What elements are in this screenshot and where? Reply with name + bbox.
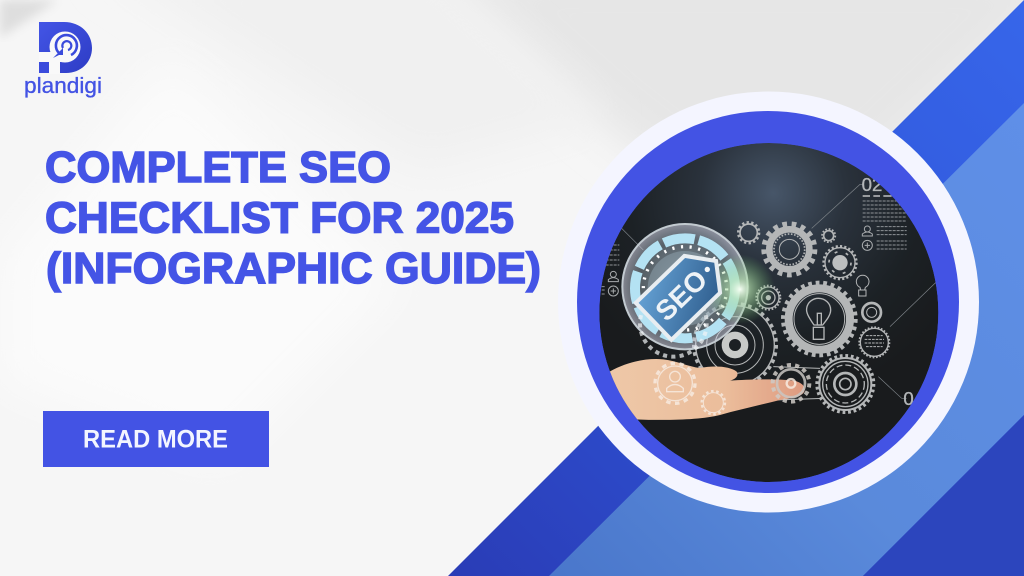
circular photo: hand holding SEO tag and gears: 02: [862, 174, 882, 195]
SEO sphere: [622, 224, 775, 357]
connector lines and data labels: [602, 184, 937, 398]
SEO price tag: [633, 254, 722, 342]
circular frame: [558, 92, 979, 512]
hand: [607, 359, 805, 420]
title: COMPLETE SEO: [45, 143, 391, 192]
gears: [694, 222, 889, 412]
icon: lightbulb: [807, 298, 831, 339]
title: CHECKLIST FOR 2025: [45, 194, 514, 242]
gear overlays on hand: [655, 363, 809, 414]
icon: D rocket mark: [39, 22, 92, 74]
SEO price tag: SEO: [649, 264, 713, 327]
diagonal blue bands: [448, 0, 1024, 576]
circular photo: hand holding SEO tag and gears: 0: [903, 388, 914, 409]
logo wordmark: plandigi: [24, 73, 102, 98]
logo: plandigi: [24, 22, 102, 98]
button: read more: [43, 411, 269, 467]
circular photo: hand holding SEO tag and gears: [599, 143, 938, 482]
title: (INFOGRAPHIC GUIDE): [46, 244, 541, 293]
title: [45, 143, 541, 293]
button: read more: READ MORE: [83, 426, 228, 454]
